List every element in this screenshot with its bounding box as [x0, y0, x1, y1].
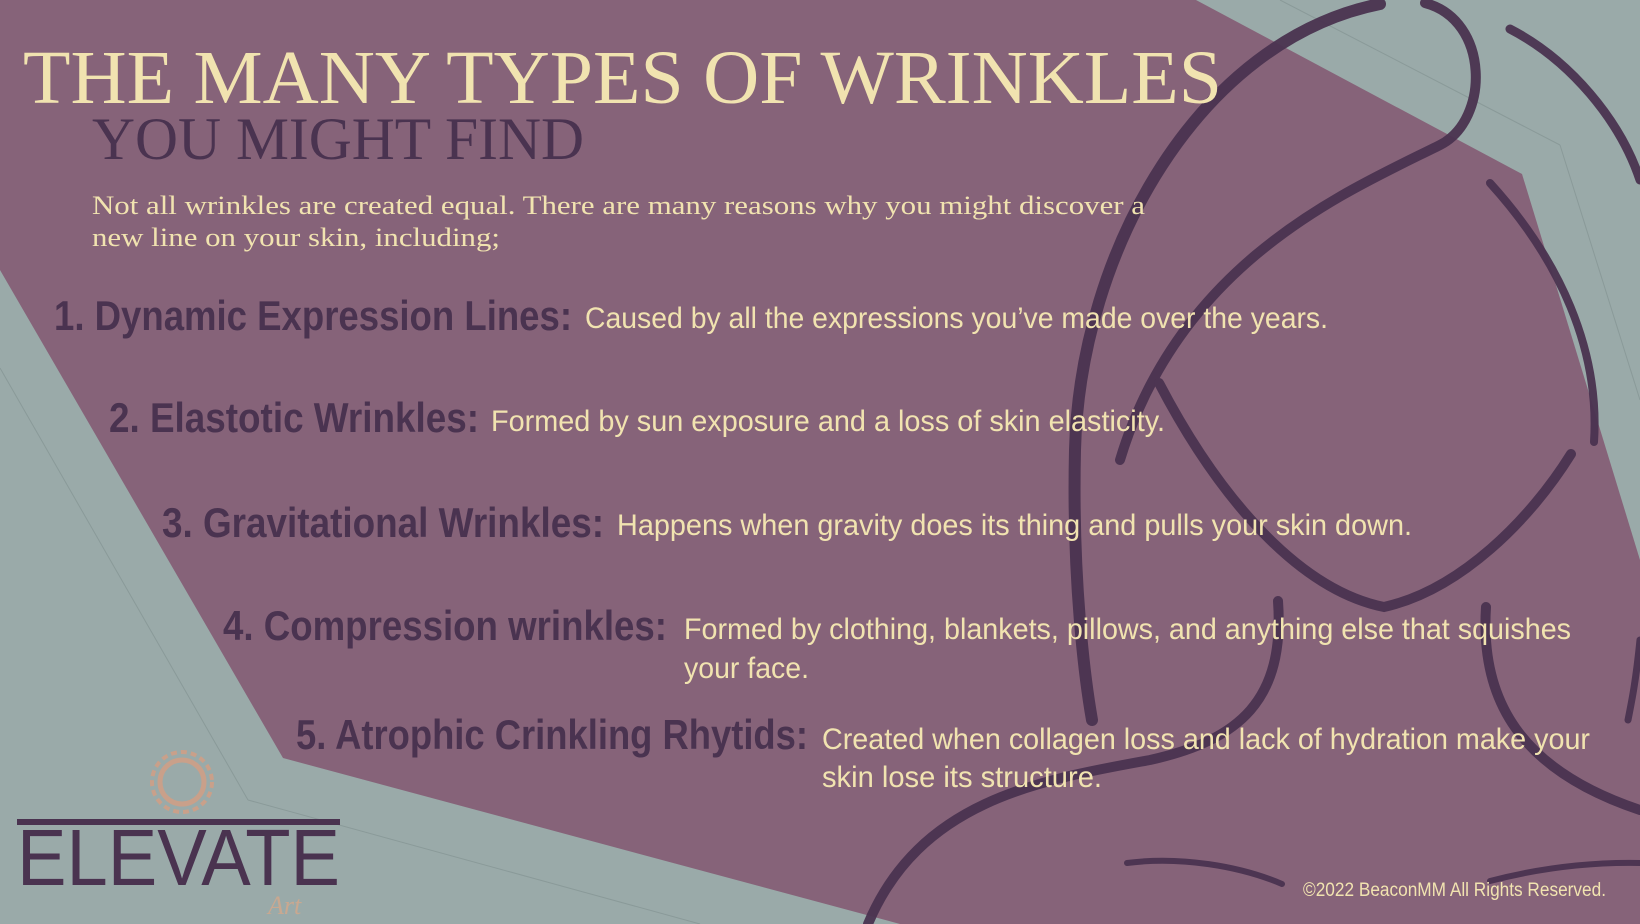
- intro text: [92, 191, 1146, 252]
- item 4: [223, 602, 1571, 685]
- item 1: [54, 292, 1328, 339]
- item 4: Formed by clothing, blankets, pillows, and anything else that squishes: [684, 613, 1571, 646]
- item 3: [162, 499, 1412, 546]
- intro text: Not all wrinkles are created equal. There are many reasons why you might discover a: [92, 191, 1146, 220]
- item 5: 5. Atrophic Crinkling Rhytids:: [296, 711, 808, 758]
- title: THE MANY TYPES OF WRINKLES: [23, 36, 1222, 120]
- logo: Elevate Art: ELEVATE: [17, 813, 340, 902]
- item 2: [109, 394, 1165, 441]
- subtitle: YOU MIGHT FIND: [92, 106, 584, 172]
- item 5: [296, 711, 1590, 794]
- item 5: skin lose its structure.: [822, 761, 1102, 794]
- item 2: 2. Elastotic Wrinkles:: [109, 394, 479, 441]
- item 2: Formed by sun exposure and a loss of skin elasticity.: [491, 405, 1165, 438]
- icon: mandala: [152, 752, 212, 812]
- item 1: 1. Dynamic Expression Lines:: [54, 292, 572, 339]
- item 3: 3. Gravitational Wrinkles:: [162, 499, 604, 546]
- item 4: 4. Compression wrinkles:: [223, 602, 667, 649]
- logo: Elevate Art: [17, 752, 340, 920]
- item 5: Created when collagen loss and lack of hydration make your: [822, 723, 1590, 756]
- copyright: ©2022 BeaconMM All Rights Reserved.: [1303, 880, 1606, 901]
- item 3: Happens when gravity does its thing and pulls your skin down.: [617, 509, 1412, 542]
- illustration: face line art: [868, 3, 1640, 924]
- item 1: Caused by all the expressions you’ve made over the years.: [585, 302, 1328, 335]
- list: wrinkle types: [54, 292, 1590, 794]
- logo: Elevate Art: Art: [266, 891, 302, 920]
- item 4: your face.: [684, 652, 809, 685]
- intro text: new line on your skin, including;: [92, 223, 500, 252]
